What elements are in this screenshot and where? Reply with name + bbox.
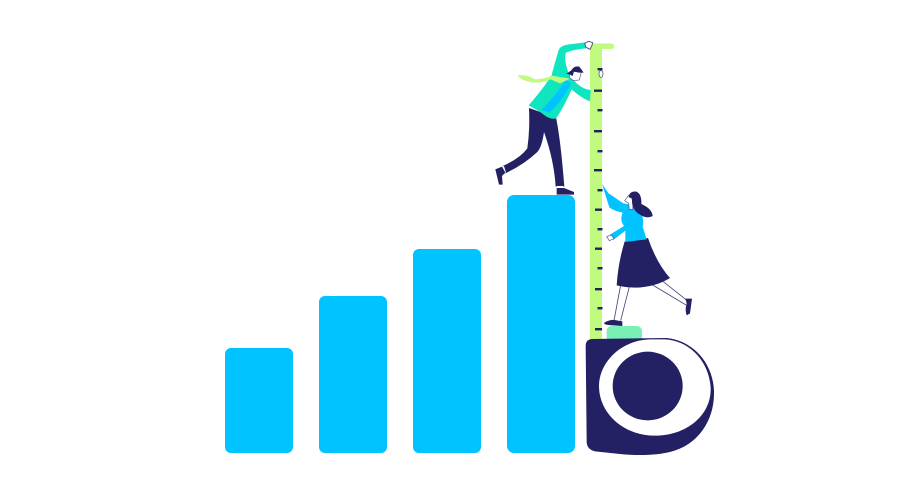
woman: shoes <box>604 299 692 326</box>
tape measure case <box>586 326 714 455</box>
case: centre hub <box>613 352 683 420</box>
man on top of the tallest bar <box>495 41 593 195</box>
woman: top and arms <box>602 184 647 242</box>
measuring tape strip <box>590 44 614 341</box>
case: white ring <box>599 339 711 436</box>
man: shoes <box>495 167 574 195</box>
woman: hand <box>607 235 614 241</box>
man: socks <box>501 166 563 189</box>
bar chart <box>225 195 575 453</box>
man: hand <box>585 41 593 49</box>
man: head <box>569 71 581 81</box>
woman on the tape <box>602 184 692 326</box>
woman: face <box>625 195 633 209</box>
man: hair <box>566 66 584 76</box>
man: legs <box>503 108 564 187</box>
case: body <box>586 338 714 455</box>
man: torso and arms <box>529 42 591 119</box>
case: green button <box>607 326 642 340</box>
man: shirt stripe <box>541 80 571 113</box>
woman: hair <box>629 192 653 217</box>
man: scarf <box>517 75 570 83</box>
woman: legs <box>614 282 687 321</box>
woman: skirt <box>617 238 670 288</box>
